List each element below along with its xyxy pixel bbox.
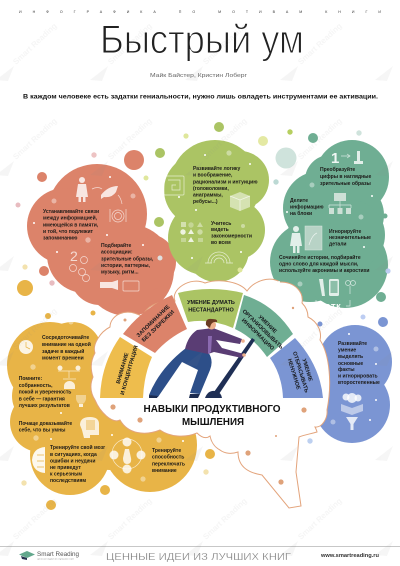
text: attention tips: внимание на одной: [42, 341, 91, 348]
text: attention tips: себе, что вы умны: [19, 426, 65, 434]
skill segment: memory: ЗАПОМИНАНИЕ: [136, 304, 172, 339]
text: attention tips: не приведут: [50, 465, 81, 471]
skill segment: thinking: НЕСТАНДАРТНО: [188, 308, 234, 314]
skill segment: discarding: ОТБРАСЫВАТЬ: [291, 351, 309, 394]
panel: thinking blob: [154, 122, 269, 282]
text: thinking tips: Развивайте логику: [193, 165, 240, 172]
text: thinking tips: видеть: [211, 227, 229, 233]
skill segment: thinking: [178, 289, 243, 328]
skill segment: attention: [100, 337, 152, 398]
text: organising tips: используйте акронимы и акростихи: [279, 267, 370, 274]
icons: organising: 1: [331, 150, 339, 167]
text: attention tips: в ситуациях, когда: [50, 452, 97, 458]
text: attention tips: ошибки и неудачи: [50, 458, 95, 465]
text: attention tips: лучших результатов: [19, 403, 70, 409]
text: organising tips: [279, 166, 371, 274]
authors: Майк Байстер, Кристин Лоберг: [150, 72, 247, 79]
watermark: Smart Reading: [106, 116, 154, 161]
text: filtering tips: [338, 340, 380, 386]
footer logo: ценные идеи из лучших книг: [37, 558, 74, 560]
text: thinking tips: во всем: [211, 240, 231, 246]
text: attention tips: Помните:: [19, 376, 43, 382]
text: attention tips: Тренируйте свой мозг: [50, 444, 105, 451]
brain dots: [110, 307, 307, 485]
watermark: Smart Reading: [106, 21, 154, 66]
text: attention tips: переключать: [152, 461, 185, 467]
text: memory tips: истории, паттерны,: [101, 263, 151, 269]
text: attention tips: Сосредоточивайте: [42, 334, 89, 341]
skill segment: thinking: УМЕНИЕ ДУМАТЬ: [187, 300, 235, 306]
text: organising tips: Сочиняйте истории, подбирайте: [279, 254, 361, 261]
text: thinking tips: и воображение,: [193, 172, 233, 178]
text: organising tips: информацию: [290, 204, 324, 210]
footer rule: [0, 546, 400, 548]
text: memory tips: имеющейся в памяти,: [43, 221, 99, 228]
watermark: Smart Reading: [296, 496, 344, 541]
panel: filtering blob: [314, 317, 392, 443]
text: attention tips: в себе — гарантия: [19, 395, 65, 402]
text: attention tips: внимание: [152, 468, 177, 474]
text: attention tips: задаче в каждый: [42, 348, 84, 355]
main caption: НАВЫКИ ПРОДУКТИВНОГО: [144, 404, 281, 415]
text: organising tips: на блоки: [290, 210, 312, 217]
footer logo: [19, 551, 79, 560]
text: memory tips: и той, что подлежит: [43, 228, 94, 235]
text: attention tips: Почаще доказывайте: [19, 420, 72, 427]
icons: attention: [19, 310, 99, 473]
watermark: Smart Reading: [11, 116, 59, 161]
text: attention tips: собранность,: [19, 382, 53, 389]
footer logo: Smart Reading: [37, 552, 79, 558]
text: memory tips: Подбирайте: [101, 242, 132, 249]
skill segment: memory: БЕЗ ЗУБРЕЖКИ: [141, 310, 176, 344]
text: filtering tips: выделять: [338, 354, 363, 360]
text: thinking tips: Учитесь: [211, 221, 231, 227]
skill segment: discarding: НЕНУЖНОЕ: [286, 358, 301, 391]
watermark: Smart Reading: [296, 116, 344, 161]
text: memory tips: [43, 208, 154, 276]
text: attention tips: к серьезным: [50, 472, 82, 478]
text: organising tips: зрительные образы: [320, 180, 371, 187]
watermark: Smart Reading: [201, 21, 249, 66]
watermark: Smart Reading: [11, 21, 59, 66]
figure pushing a lever: [149, 319, 255, 398]
OTK label: ОТК: [325, 302, 341, 311]
text: memory tips: Устанавливайте связи: [43, 208, 99, 215]
watermark: Smart Reading: [11, 306, 59, 351]
skill segment: organising: УМЕНИЕ: [257, 314, 278, 335]
text: memory tips: между информацией,: [43, 215, 98, 222]
text: attention tips: покой и уверенность: [19, 389, 71, 396]
text: thinking tips: анаграммы,: [193, 192, 223, 198]
watermark: Smart Reading: [106, 496, 154, 541]
text: filtering tips: основные: [338, 361, 363, 367]
skill segment: attention: ВНИМАНИЕ: [116, 352, 130, 385]
main caption: [144, 404, 281, 428]
icon: brain and funnel: [341, 393, 363, 430]
skill segment: organising: ОРГАНИЗОВЫВАТЬ: [241, 309, 284, 351]
panel: attention blob: [7, 280, 215, 510]
text: thinking tips: закономерности: [211, 234, 252, 240]
skill segment: organising: [235, 295, 293, 357]
icon: switch attention: [110, 438, 146, 474]
text: organising tips: Игнорируйте: [329, 228, 361, 235]
text: filtering tips: второстепенные: [338, 380, 380, 386]
skill segment: attention: И КОНЦЕНТРАЦИЯ: [120, 345, 140, 396]
text: attention tips: последствиям: [50, 478, 86, 484]
text: thinking tips: (головоломки,: [193, 186, 229, 192]
icons: thinking: [164, 176, 250, 263]
text: attention tips: способность: [152, 454, 184, 461]
watermark: Smart Reading: [11, 496, 59, 541]
skill segment: discarding: УМЕНИЕ: [300, 358, 313, 383]
brain outline: [91, 279, 330, 508]
text: filtering tips: факты: [338, 366, 355, 373]
text: memory tips: ассоциации:: [101, 250, 133, 256]
text: organising tips: детали: [329, 242, 347, 248]
text: memory tips: музыку, ритм...: [101, 270, 139, 276]
skill segment: memory: [123, 295, 187, 353]
panel: organising blob: [270, 133, 389, 308]
title: Быстрый ум: [100, 18, 304, 62]
text: organising tips: цифры в наглядные: [320, 173, 371, 180]
icons: memory: 2: [70, 248, 78, 264]
text: filtering tips: и игнорировать: [338, 374, 378, 380]
footer slogan: ЦЕННЫЕ ИДЕИ ИЗ ЛУЧШИХ КНИГ: [106, 551, 291, 563]
text: memory tips: запоминанию: [43, 236, 78, 242]
text: attention tips: [19, 334, 185, 484]
white sparkle dots: [26, 150, 378, 482]
watermark: Smart Reading: [201, 496, 249, 541]
text: filtering tips: умение: [338, 348, 356, 354]
text: organising tips: Преобразуйте: [320, 166, 355, 173]
watermark: Smart Reading: [296, 306, 344, 351]
text: thinking tips: ребусы...): [193, 198, 218, 205]
watermark: Smart Reading: [201, 116, 249, 161]
watermark: Smart Reading: [296, 21, 344, 66]
text: memory tips: зрительные образы,: [101, 255, 154, 262]
subtitle: В каждом человеке есть задатки гениальности, нужно лишь овладеть инструментами ее активации.: [23, 94, 378, 100]
skill segment: discarding: [270, 338, 323, 398]
decorative dots: [16, 129, 391, 486]
header label: ИНФОГРАФИКА ПО МОТИВАМ КНИГИ: [19, 10, 381, 14]
main caption: МЫШЛЕНИЯ: [182, 417, 244, 428]
panel: memory blob: [27, 150, 176, 316]
icons: memory: [70, 177, 139, 291]
text: attention tips: момент времени: [42, 356, 84, 362]
text: organising tips: незначительные: [329, 235, 371, 241]
text: attention tips: Тренируйте: [152, 447, 181, 454]
footer url: www.smartreading.ru: [320, 553, 379, 559]
icons: organising: [290, 150, 363, 311]
text: organising tips: одно слово для каждой мысли,: [279, 260, 359, 268]
text: thinking tips: [193, 165, 258, 246]
text: thinking tips: рационализм и интуицию: [193, 180, 258, 186]
skill segment: organising: ИНФОРМАЦИЮ: [240, 318, 275, 352]
text: organising tips: Делите: [290, 198, 308, 204]
text: filtering tips: Развивайте: [338, 340, 367, 347]
